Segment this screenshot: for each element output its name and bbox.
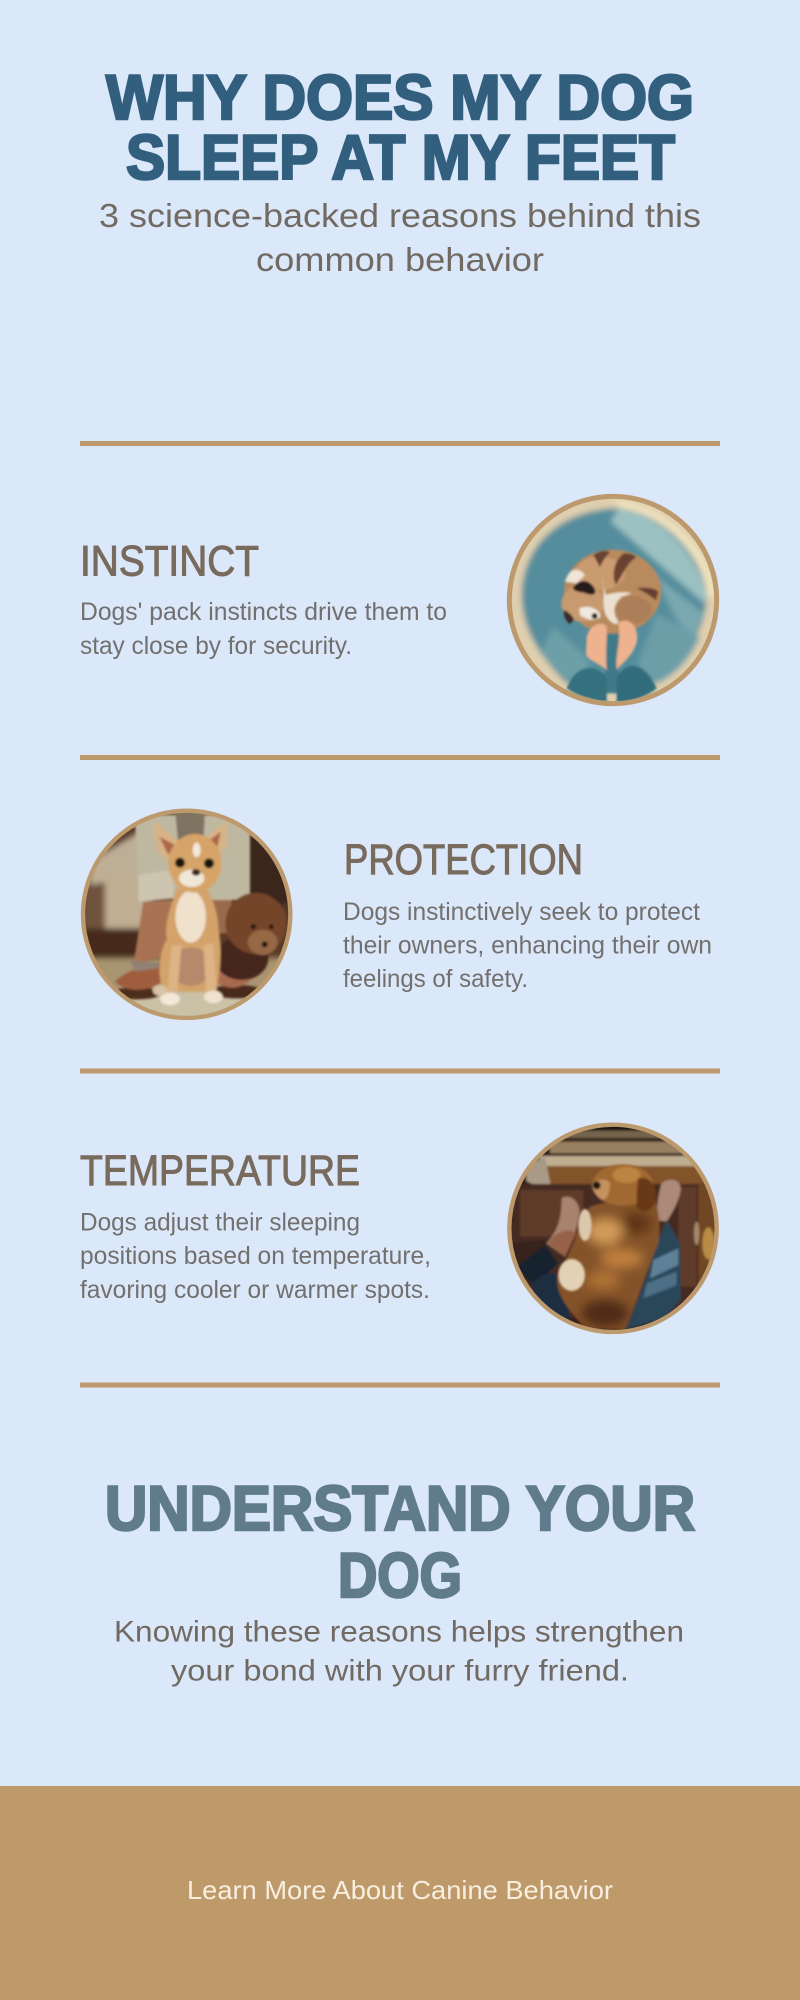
text: instinct description: stay close by for security. xyxy=(80,632,352,660)
text: protection description xyxy=(343,898,712,993)
text: protection description: feelings of safety. xyxy=(343,965,528,993)
panel: instinct xyxy=(80,490,723,710)
panel: protection xyxy=(77,805,712,1028)
title xyxy=(106,63,694,193)
text: instinct description: Dogs' pack instincts drive them to xyxy=(80,598,447,626)
heading: understand your dog: DOG xyxy=(338,1541,462,1611)
heading: protection: PROTECTION xyxy=(344,836,583,884)
panel: temperature xyxy=(80,1120,723,1340)
text: instinct description xyxy=(80,598,447,660)
text: protection description: Dogs instinctively seek to protect xyxy=(343,898,700,926)
text: closing message xyxy=(114,1616,684,1688)
heading: temperature: TEMPERATURE xyxy=(80,1147,360,1195)
text: closing message: your bond with your furry friend. xyxy=(171,1654,629,1688)
title: SLEEP AT MY FEET xyxy=(126,123,675,193)
image: puppy curled at owner's feet xyxy=(503,490,723,710)
text: protection description: their owners, enhancing their own xyxy=(343,932,712,960)
text: temperature description: Dogs adjust their sleeping xyxy=(80,1208,360,1236)
heading: instinct: INSTINCT xyxy=(80,538,259,586)
subtitle: 3 science-backed reasons behind this xyxy=(99,197,701,234)
text: temperature description: favoring cooler or warmer spots. xyxy=(80,1276,430,1304)
subtitle xyxy=(99,197,701,278)
heading: understand your dog xyxy=(105,1474,695,1611)
title: WHY DOES MY DOG xyxy=(106,63,694,133)
text: closing message: Knowing these reasons helps strengthen xyxy=(114,1616,684,1648)
footer call to action: Learn More About Canine Behavior xyxy=(187,1875,613,1905)
subtitle: common behavior xyxy=(256,241,544,278)
image: chihuahua sitting at owner's feet xyxy=(77,805,297,1028)
text: temperature description xyxy=(80,1208,431,1304)
footer band xyxy=(0,1786,800,2000)
text: temperature description: positions based on temperature, xyxy=(80,1242,431,1270)
heading: understand your dog: UNDERSTAND YOUR xyxy=(105,1474,695,1544)
image: golden dog lying between legs xyxy=(503,1120,723,1340)
